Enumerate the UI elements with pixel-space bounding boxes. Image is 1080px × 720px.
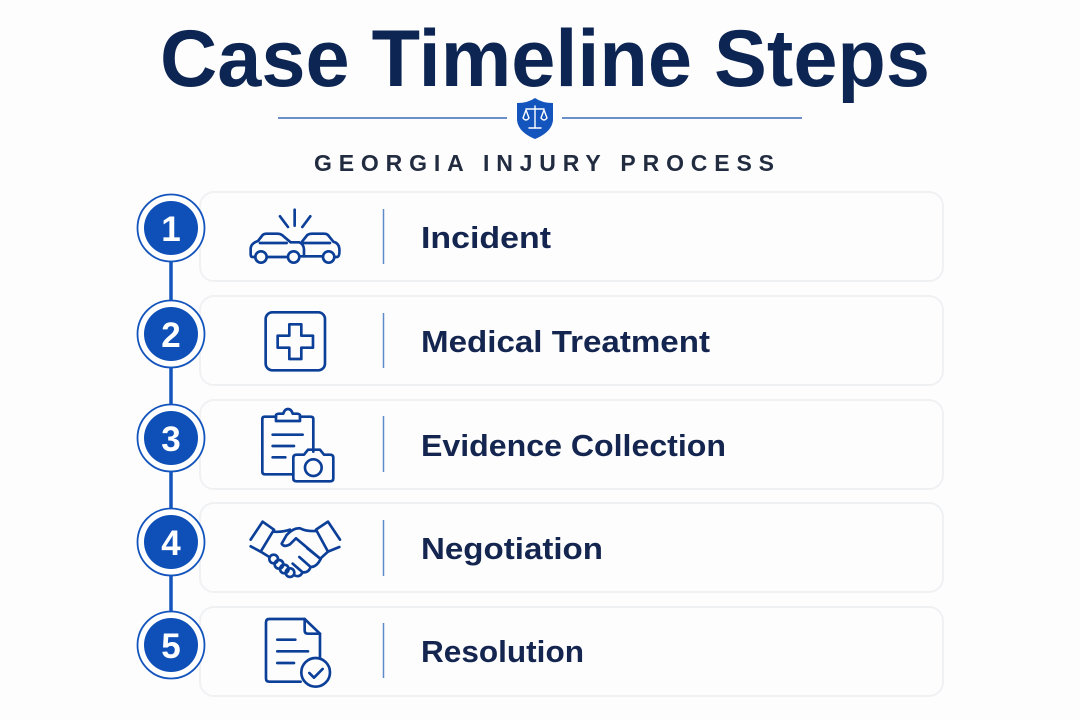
panel: step 2 medical treatment [138,296,943,385]
step number 5: 5 [161,627,181,666]
label: negotiation: Negotiation [421,531,603,566]
step number 3: 3 [161,420,181,459]
step number 2 [138,300,204,368]
step number 2: 2 [161,316,181,355]
timeline connector [169,250,173,630]
subtitle: GEORGIA INJURY PROCESS [314,150,774,176]
step number 4 [138,508,204,576]
icon: medical cross [266,312,325,370]
step number 1 [138,194,204,262]
icon: document with check [266,619,330,687]
icon: clipboard and camera [262,409,333,481]
step number 4: 4 [161,524,181,563]
panel: step 5 resolution [138,607,943,696]
panel: step 3 evidence collection [138,400,943,489]
label: medical treatment: Medical Treatment [421,324,710,359]
label: incident: Incident [421,220,551,255]
panel: step 1 incident [138,192,943,281]
label: evidence collection: Evidence Collection [421,428,726,463]
icon: scales of justice shield [517,98,553,139]
step number 1: 1 [161,210,181,249]
icon: car collision [251,210,339,263]
label: resolution: Resolution [421,634,584,669]
step number 5 [138,612,204,678]
panel: step 4 negotiation [138,503,943,592]
header divider with shield [278,98,802,139]
icon: handshake [251,522,340,577]
title: Case Timeline Steps [160,14,930,104]
step number 3 [138,404,204,472]
